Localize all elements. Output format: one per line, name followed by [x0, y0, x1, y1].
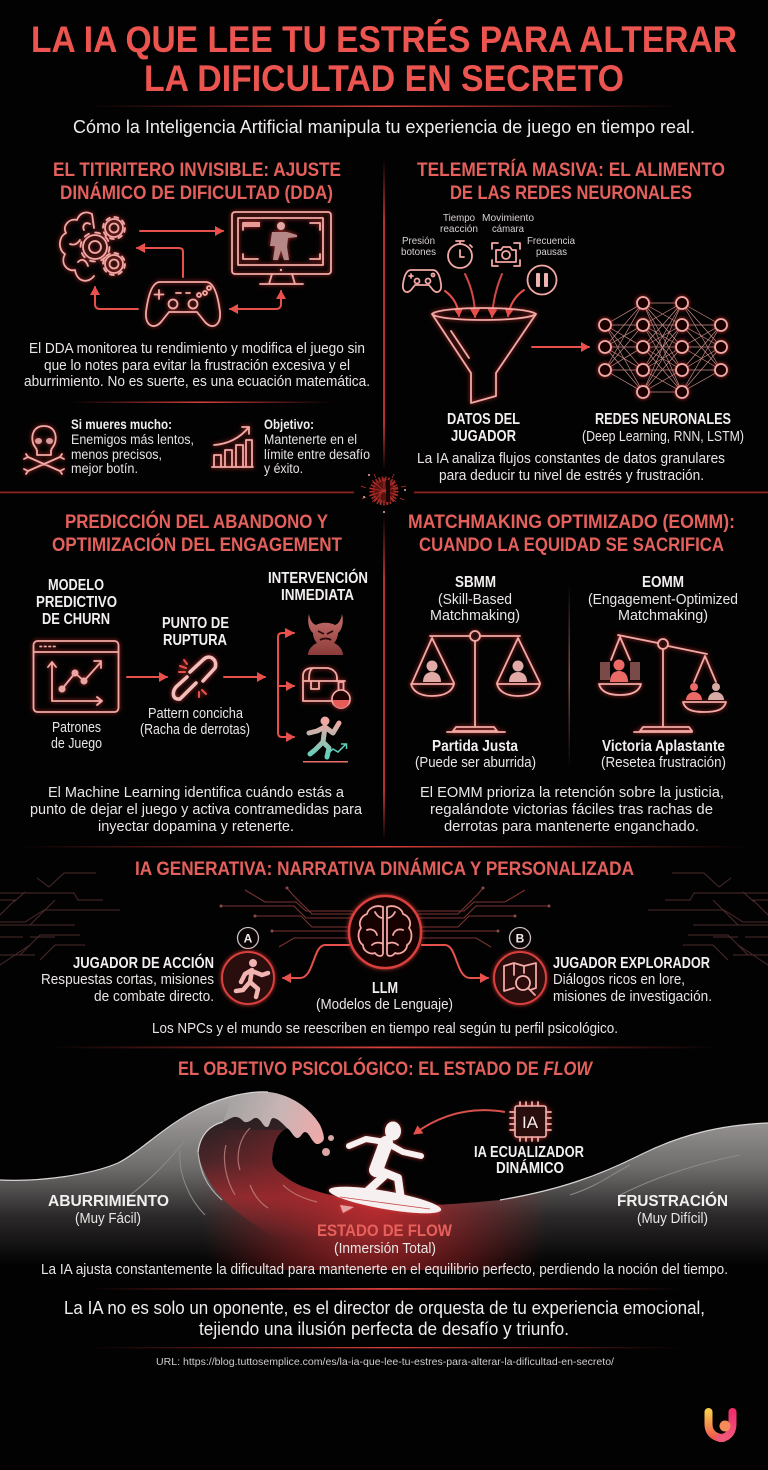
text: if you die a lot: menos precisos, [71, 447, 162, 462]
label: churn model: PREDICTIVO [36, 594, 117, 611]
label: boredom [48, 1193, 169, 1227]
label: crushing victory: (Resetea frustración) [601, 754, 726, 771]
label: neural networks [582, 411, 744, 445]
icon: balanced scale [411, 631, 540, 732]
text: objective [264, 417, 370, 476]
heading: telemetry [417, 159, 725, 204]
label: crushing victory: Victoria Aplastante [602, 738, 725, 755]
title [31, 19, 737, 99]
label: player data: JUGADOR [451, 428, 516, 445]
label: churn model: DE CHURN [42, 611, 110, 628]
illustration: wave [0, 1092, 768, 1270]
icon: tilted scale [599, 635, 726, 732]
heading: churn: PREDICCIÓN DEL ABANDONO Y [65, 511, 328, 533]
closing statement: La IA no es solo un oponente, es el director de orquesta de tu experiencia emocional, [64, 1298, 705, 1318]
text: if you die a lot: mejor botín. [71, 461, 138, 476]
icon: small gamepad [403, 270, 441, 292]
label: churn model [36, 577, 117, 628]
label: EOMM: Matchmaking) [618, 607, 708, 624]
labels: telemetry inputs: Presión [402, 235, 435, 247]
label: breaking point: PUNTO DE [162, 615, 229, 632]
labels: telemetry inputs: Tiempo [443, 212, 475, 224]
panel: flow state [0, 1058, 768, 1278]
text: explorer player: Diálogos ricos en lore, [553, 971, 685, 988]
text: generative description: Los NPCs y el mundo se reescriben en tiempo real según tu perfil psicológico. [152, 1020, 618, 1037]
label: frustration: (Muy Difícil) [637, 1210, 708, 1227]
text: DDA description: El DDA monitorea tu rendimiento y modifica el juego sin [29, 340, 365, 357]
icon: gamepad [146, 282, 220, 326]
text: matchmaking description [420, 784, 724, 835]
heading: DDA: DINÁMICO DE DIFICULTAD (DDA) [60, 182, 333, 204]
text: DDA description [24, 340, 370, 390]
badge: A: A [244, 932, 253, 946]
badge: B [510, 928, 530, 948]
text: if you die a lot: Si mueres mucho: [71, 417, 172, 432]
badge: B: B [516, 932, 525, 946]
icon: action player [222, 952, 274, 1004]
icon: surfer [327, 1122, 443, 1219]
heading: DDA [53, 160, 341, 204]
text: if you die a lot: Enemigos más lentos, [71, 432, 194, 447]
panel: churn prediction [30, 511, 368, 835]
label: boredom: (Muy Fácil) [75, 1210, 141, 1227]
arrow: LLM to action player [283, 945, 349, 978]
icon: chart window [34, 641, 118, 712]
panel: DDA [24, 160, 370, 476]
icon: monitor [232, 212, 331, 284]
label: neural networks: REDES NEURONALES [595, 411, 731, 428]
panel: generative AI [0, 858, 768, 1037]
heading: flow: EL OBJETIVO PSICOLÓGICO: EL ESTADO DE FLOW [178, 1058, 594, 1080]
source URL: URL: https://blog.tuttosemplice.com/es/la-ia-que-lee-tu-estres-para-alterar-la-dificultad-en-secreto/ [156, 1356, 614, 1368]
text: telemetry description [417, 450, 725, 484]
labels: telemetry inputs: Movimiento [482, 212, 534, 224]
label: churn model: MODELO [48, 577, 104, 594]
text: telemetry description: La IA analiza flujos constantes de datos granulares [417, 450, 725, 467]
icon: broken chain [173, 657, 216, 699]
text: matchmaking description: derrotas para mantenerte enganchado. [444, 818, 699, 835]
label: frustration [617, 1192, 728, 1227]
label: fair match: (Puede ser aburrida) [415, 754, 536, 771]
icon: AI chip [510, 1102, 551, 1141]
heading: telemetry: DE LAS REDES NEURONALES [450, 183, 692, 204]
labels: telemetry inputs: reacción [440, 223, 478, 235]
label: LLM: (Modelos de Lenguaje) [316, 996, 453, 1013]
heading: telemetry: TELEMETRÍA MASIVA: EL ALIMENTO [417, 159, 725, 181]
heading: matchmaking: CUANDO LA EQUIDAD SE SACRIFICA [419, 535, 724, 556]
icon: devil [308, 614, 343, 655]
panel: matchmaking [408, 512, 738, 835]
arrow: chip to surfer [414, 1110, 505, 1134]
text: action player: Respuestas cortas, misiones [41, 971, 214, 988]
icon: LLM brain [349, 896, 421, 968]
label: LLM: LLM [372, 980, 398, 997]
arrow: LLM to explorer player [422, 945, 488, 978]
arrow: funnel to network [532, 346, 589, 348]
icon: runner [303, 716, 348, 762]
text: matchmaking description: regalándote victorias fáciles tras rachas de [430, 801, 713, 818]
label: immediate intervention: INTERVENCIÓN [268, 569, 368, 587]
arrow: gamepad to brain lower [95, 287, 138, 309]
closing statement [64, 1298, 705, 1339]
label: fair match: Partida Justa [432, 738, 518, 755]
label: player data: DATOS DEL [447, 411, 520, 428]
text: DDA description: aburrimiento. No es suerte, es una ecuación matemática. [24, 373, 370, 390]
label: flow state: (Inmersión Total) [334, 1240, 436, 1257]
text: churn description: punto de dejar el juego y activa contramedidas para [30, 801, 363, 818]
label: SBMM: Matchmaking) [430, 607, 520, 624]
label: crushing victory [601, 738, 726, 771]
arrow: gamepad and monitor [230, 291, 281, 309]
text: objective: Objetivo: [264, 417, 314, 432]
text: if you die a lot [71, 417, 194, 476]
label: SBMM: SBMM [455, 574, 496, 591]
label: pattern [140, 705, 250, 738]
text: explorer player: misiones de investigación. [553, 988, 712, 1005]
icon: explorer player [494, 952, 546, 1004]
heading: matchmaking: MATCHMAKING OPTIMIZADO (EOMM): [408, 512, 735, 533]
text: DDA description: que lo notes para evitar la frustración excesiva y el [44, 357, 350, 374]
text: action player: JUGADOR DE ACCIÓN [73, 954, 214, 972]
label: fair match [415, 738, 536, 771]
icon: rising bar chart [212, 427, 253, 467]
icon: skull [24, 426, 64, 474]
heading: churn [52, 511, 342, 556]
label: game patterns: Patrones [52, 719, 101, 736]
label: EOMM [588, 574, 738, 624]
label: SBMM: (Skill-Based [438, 591, 512, 608]
subtitle: Cómo la Inteligencia Artificial manipula tu experiencia de juego en tiempo real. [73, 116, 695, 137]
text: explorer player [553, 955, 712, 1005]
label: pattern: (Racha de derrotas) [140, 721, 250, 738]
labels: telemetry inputs: cámara [492, 223, 524, 235]
icon: stopwatch [448, 241, 472, 268]
text: matchmaking description: El EOMM prioriza la retención sobre la justicia, [420, 784, 724, 801]
label: game patterns: de Juego [51, 735, 102, 752]
icon: camera [492, 243, 520, 266]
icon: central chip [361, 474, 406, 513]
label: AI equalizer: DINÁMICO [496, 1160, 564, 1177]
label: pattern: Pattern concicha [148, 705, 244, 722]
label: EOMM: EOMM [642, 574, 684, 591]
text: churn description: El Machine Learning identifica cuándo estás a [48, 784, 345, 801]
arrow: branching tree [278, 628, 295, 737]
text: objective: Mantenerte en el [264, 432, 357, 447]
heading: DDA: EL TITIRITERO INVISIBLE: AJUSTE [53, 160, 341, 181]
arrow: gamepad to brain [137, 248, 183, 277]
icon: pause [528, 266, 556, 294]
label: immediate intervention [268, 569, 368, 604]
circuit traces [0, 873, 768, 965]
label: boredom: ABURRIMIENTO [48, 1193, 169, 1210]
text: action player: de combate directo. [94, 988, 214, 1005]
text: explorer player: JUGADOR EXPLORADOR [553, 955, 710, 972]
icon: brain with gears [60, 212, 125, 281]
label: flow state: ESTADO DE FLOW [317, 1221, 453, 1240]
text: telemetry description: para deducir tu nivel de estrés y frustración. [439, 467, 704, 484]
label: breaking point: RUPTURA [163, 632, 227, 649]
arrows: data into funnel [445, 274, 524, 317]
text: churn description [30, 784, 363, 835]
icon: funnel [432, 308, 536, 403]
labels: telemetry inputs: botones [401, 246, 436, 258]
logo [708, 1412, 732, 1438]
label: player data [447, 411, 520, 445]
label: immediate intervention: INMEDIATA [281, 587, 354, 604]
text: objective: límite entre desafío [264, 447, 370, 462]
label: AI equalizer [474, 1144, 584, 1177]
label: breaking point [162, 615, 229, 649]
label: LLM [316, 980, 453, 1013]
labels: telemetry inputs [401, 212, 575, 258]
label: SBMM [430, 574, 520, 624]
labels: telemetry inputs: Frecuencia [527, 235, 575, 247]
label: game patterns [51, 719, 102, 752]
arrow: breaking point to intervention [224, 676, 265, 678]
label: EOMM: (Engagement-Optimized [588, 591, 738, 608]
text: churn description: inyectar dopamina y retenerte. [98, 818, 294, 835]
title: LA DIFICULTAD EN SECRETO [144, 58, 624, 99]
labels: telemetry inputs: pausas [536, 246, 567, 258]
heading: matchmaking [408, 512, 735, 556]
heading: generative AI: IA GENERATIVA: NARRATIVA DINÁMICA Y PERSONALIZADA [135, 858, 634, 880]
panel: telemetry [401, 159, 744, 484]
closing statement: tejiendo una ilusión perfecta de desafío y triunfo. [199, 1319, 569, 1339]
icon: chest and potion [303, 668, 350, 708]
icon: AI chip: IA [522, 1113, 539, 1132]
label: AI equalizer: IA ECUALIZADOR [474, 1144, 584, 1161]
text: objective: y éxito. [264, 461, 303, 476]
chart: neural network [599, 297, 727, 398]
badge: A [238, 928, 258, 948]
text: action player [41, 954, 214, 1005]
label: frustration: FRUSTRACIÓN [617, 1192, 728, 1210]
arrow: brain to monitor [140, 230, 223, 232]
label: flow state [317, 1221, 453, 1257]
arrow: model to breaking point [127, 676, 167, 678]
heading: churn: OPTIMIZACIÓN DEL ENGAGEMENT [52, 534, 342, 556]
